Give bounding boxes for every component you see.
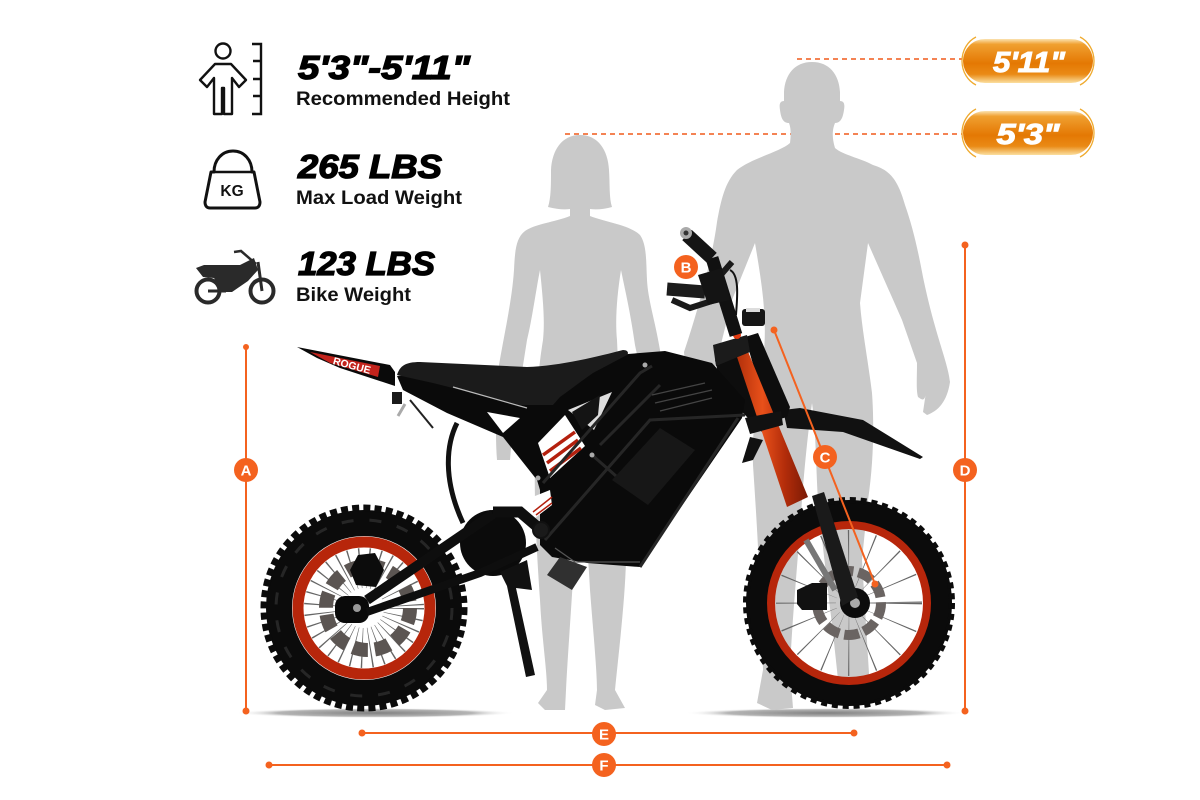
dimension C [770, 326, 878, 588]
motorbike [264, 227, 952, 708]
icon: weight: KG [220, 183, 244, 200]
label B [674, 255, 698, 279]
handlebars and headlight [667, 227, 765, 335]
icon: motorbike [196, 251, 274, 302]
label B: B [681, 260, 692, 276]
silhouette: female figure [496, 135, 668, 710]
stat: max load: 265 LBS [297, 148, 442, 185]
dimension F [266, 753, 950, 777]
dimension A: A [241, 462, 252, 480]
dimension D: D [960, 462, 971, 480]
dimension E [358, 722, 858, 746]
tail fender with decal [297, 347, 395, 386]
badge: 5'11": 5'11" [993, 47, 1066, 79]
rear cable and brake light [392, 392, 463, 523]
stat: bike weight: 123 LBS [298, 245, 435, 282]
stat: recommended height [296, 49, 511, 110]
badge: 5'3" [962, 109, 1094, 157]
badge: 5'3": 5'3" [996, 119, 1061, 151]
dimension E: E [599, 726, 609, 744]
rear wheel [264, 508, 464, 708]
height guide lines [565, 59, 962, 134]
stat: bike weight [296, 245, 435, 306]
seat [397, 350, 628, 408]
silhouette: male figure [684, 62, 950, 710]
stat: recommended height: Recommended Height [296, 89, 511, 110]
tail fender with decal: ROGUE [332, 355, 372, 377]
badge: 5'11" [962, 37, 1094, 85]
frame and battery [397, 351, 745, 567]
front wheel [746, 500, 952, 706]
kickstand and footpeg [500, 557, 587, 677]
dimension D [953, 242, 977, 714]
fork and fender [713, 331, 923, 606]
dimension F: F [599, 758, 609, 774]
hub motor [460, 510, 526, 576]
frame windows [487, 392, 612, 518]
dimension C: C [820, 450, 831, 466]
stat: recommended height: 5'3"-5'11" [298, 49, 470, 86]
icon: weight [205, 151, 260, 208]
stat: max load [296, 148, 463, 209]
ground shadows [235, 708, 965, 718]
stat: bike weight: Bike Weight [296, 285, 412, 306]
stat: max load: Max Load Weight [296, 188, 463, 209]
icon: person with height ruler [200, 44, 261, 114]
dimension A [234, 344, 258, 714]
swingarm [367, 512, 549, 612]
